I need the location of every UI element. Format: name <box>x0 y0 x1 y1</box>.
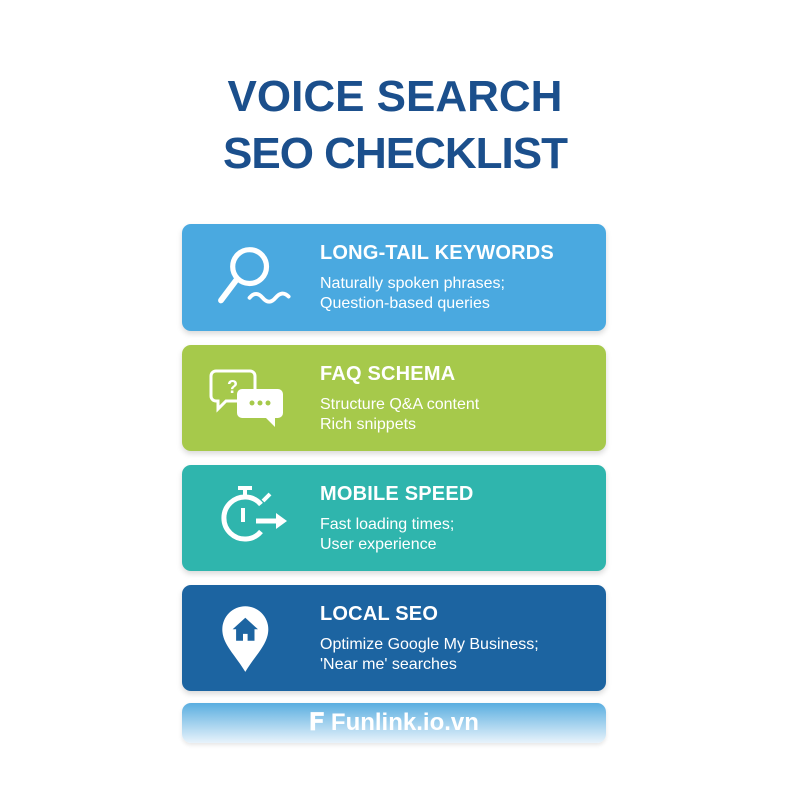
text <box>320 636 539 673</box>
title: VOICE SEARCH <box>228 72 562 121</box>
heading: LONG-TAIL KEYWORDS <box>320 242 554 264</box>
text <box>320 275 505 312</box>
heading: FAQ SCHEMA <box>320 363 455 385</box>
text: Structure Q&A content <box>320 396 479 413</box>
panel: local seo <box>182 585 606 691</box>
text: Question-based queries <box>320 295 490 312</box>
text: Fast loading times; <box>320 516 454 533</box>
text: 'Near me' searches <box>320 656 457 673</box>
text: Naturally spoken phrases; <box>320 275 505 292</box>
text: Optimize Google My Business; <box>320 636 539 653</box>
panel: mobile speed <box>182 465 606 571</box>
text: User experience <box>320 536 436 553</box>
icon: map pin with house <box>222 606 268 672</box>
title <box>223 72 568 178</box>
text: Rich snippets <box>320 416 416 433</box>
icon: chat bubbles: ? <box>227 377 238 397</box>
icon: stopwatch <box>221 486 287 542</box>
text <box>320 396 480 433</box>
brand text: 𝐅 Funlink.io.vn <box>309 709 479 736</box>
icon: chat bubbles <box>210 370 283 427</box>
text <box>320 516 454 553</box>
panel: faq schema <box>182 345 606 451</box>
footer brand <box>182 703 606 743</box>
title: SEO CHECKLIST <box>223 129 567 178</box>
panel: long-tail keywords <box>182 224 606 331</box>
heading: LOCAL SEO <box>320 603 438 625</box>
heading: MOBILE SPEED <box>320 483 474 505</box>
icon: magnifier <box>218 247 291 304</box>
